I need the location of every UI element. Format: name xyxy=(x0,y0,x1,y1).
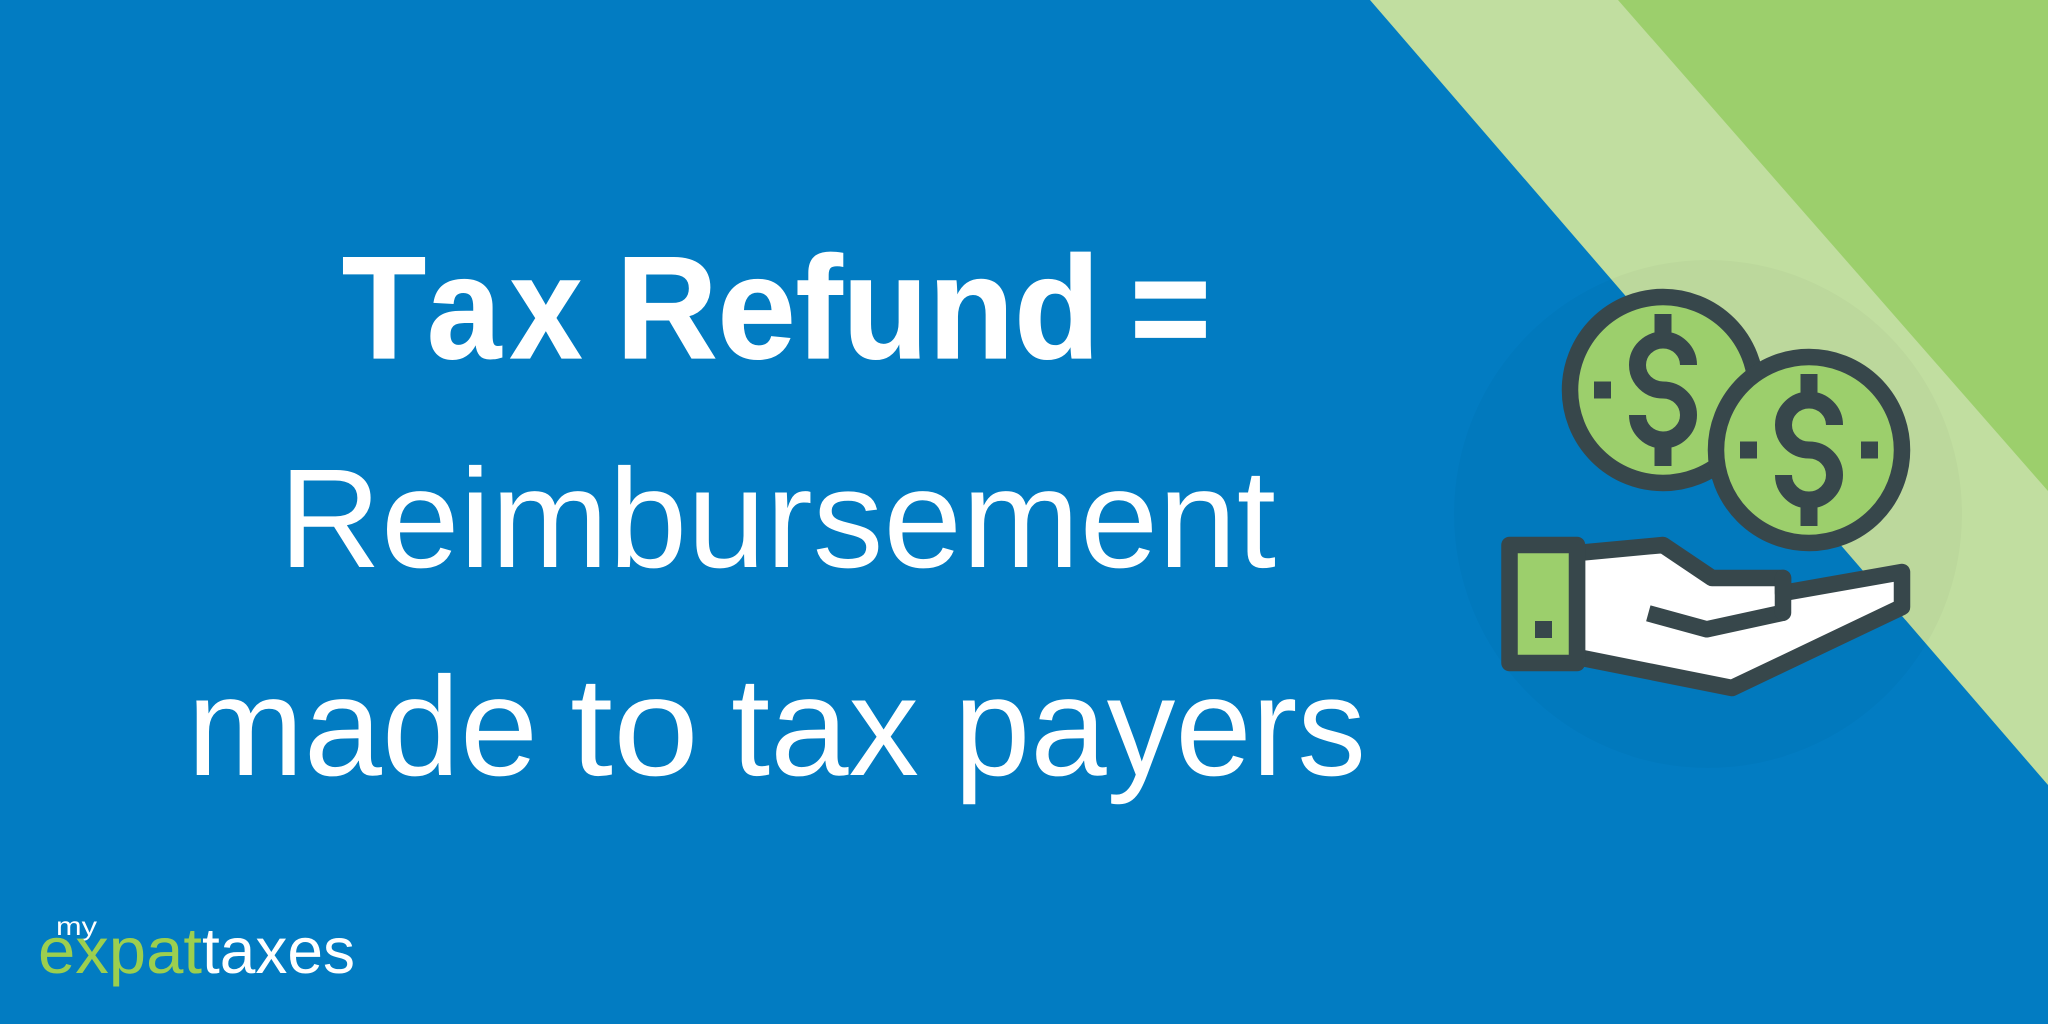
text line: made to tax payers: made xyxy=(187,647,538,805)
icon: coins over open hand xyxy=(1510,297,1902,688)
logo word: taxes: taxes xyxy=(202,914,355,987)
background: light green diagonal band xyxy=(1370,0,2048,785)
text line: Reimbursement: Reimbursement xyxy=(279,439,1276,597)
icon: front coin xyxy=(1716,357,1902,543)
icon backdrop circle xyxy=(1454,260,1962,768)
background: green corner triangle xyxy=(1618,0,2048,491)
text line: made to tax payers: tax xyxy=(731,647,919,805)
text line: made to tax payers: to xyxy=(570,647,699,805)
icon: open hand xyxy=(1577,545,1902,688)
title: Tax Refund = xyxy=(342,226,1211,389)
logo word: expat: expat xyxy=(38,914,202,987)
title: Tax Refund =: Refund xyxy=(616,226,1100,389)
logo: my expat taxes xyxy=(38,911,355,987)
text line: made to tax payers: payers xyxy=(954,647,1366,805)
icon: back coin xyxy=(1570,297,1756,483)
icon: shirt cuff xyxy=(1510,545,1577,663)
text line: made to tax payers xyxy=(187,647,1366,805)
logo word: my: my xyxy=(56,911,97,941)
title: Tax Refund =: = xyxy=(1130,226,1211,389)
title: Tax Refund =: x xyxy=(510,226,582,389)
title: Tax Refund =: T xyxy=(342,226,426,389)
title: Tax Refund =: a xyxy=(427,226,503,389)
